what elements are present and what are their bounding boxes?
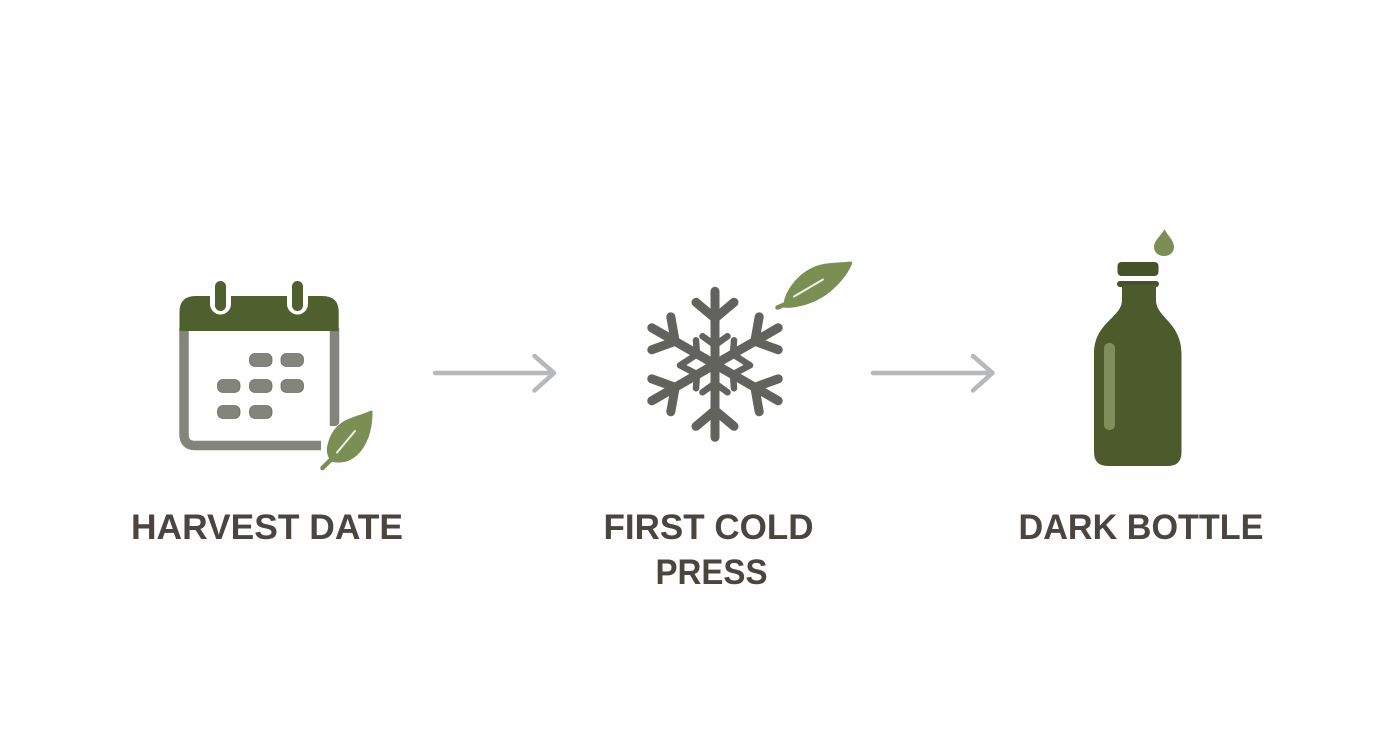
label: first cold press: PRESS xyxy=(656,552,768,592)
icon: oil drop xyxy=(1154,229,1174,256)
step 2: first cold press xyxy=(604,262,852,592)
arrow: step 1 to step 2 xyxy=(435,356,554,390)
icon: calendar xyxy=(180,281,339,446)
calendar header band xyxy=(180,296,339,331)
label: harvest date: HARVEST DATE xyxy=(131,507,403,547)
step 1: harvest date xyxy=(131,281,403,547)
step 3: dark bottle xyxy=(1018,229,1264,547)
icon: snowflake xyxy=(642,291,788,437)
icon: bottle xyxy=(1094,262,1182,466)
calendar body outline xyxy=(184,328,334,446)
calendar date cells xyxy=(218,354,304,418)
label: first cold press xyxy=(604,507,814,592)
label: first cold press: FIRST COLD xyxy=(604,507,814,547)
bottle body xyxy=(1094,285,1182,466)
bottle collar xyxy=(1117,281,1159,287)
arrow: step 2 to step 3 xyxy=(873,356,992,390)
bottle cap xyxy=(1118,262,1158,276)
bottle highlight xyxy=(1104,343,1115,430)
label: dark bottle: DARK BOTTLE xyxy=(1018,507,1264,547)
calendar binding rings xyxy=(210,281,308,314)
icon: leaf on calendar xyxy=(322,410,373,468)
icon: leaf beside snowflake xyxy=(778,262,852,308)
